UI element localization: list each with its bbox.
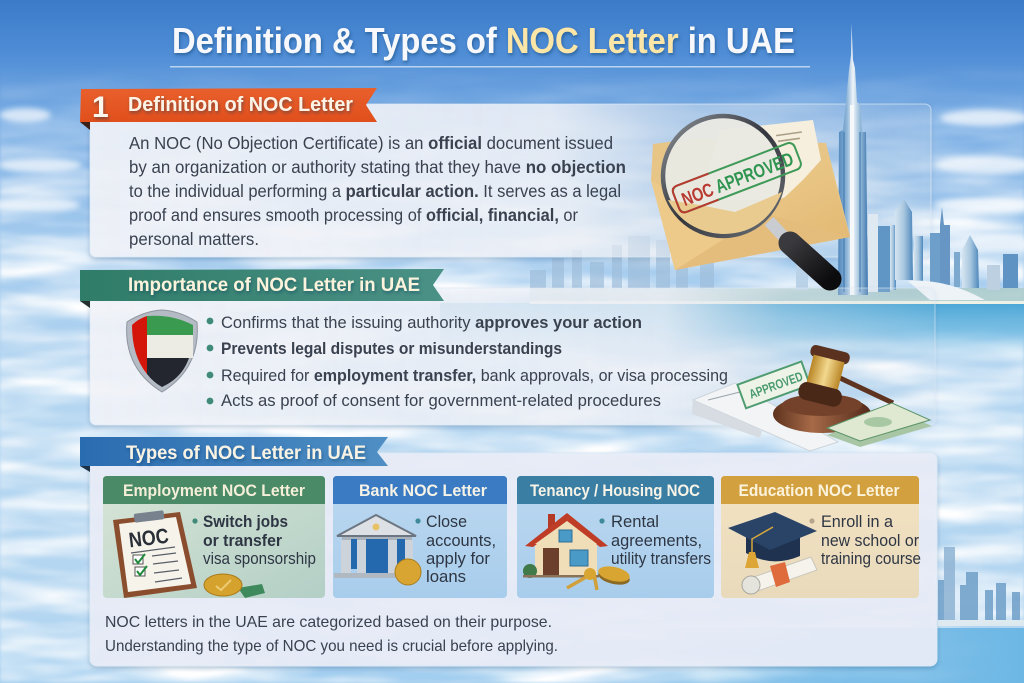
skyline: Dubai towers — [796, 23, 1018, 300]
illustration: gavel, papers and cash — [692, 343, 932, 451]
bullet list: Prevents legal disputes or misunderstandings — [221, 339, 562, 358]
ribbon: types heading — [80, 437, 388, 472]
icon: graduation cap and diploma — [728, 512, 817, 594]
icon: bank building — [334, 515, 421, 585]
card: tenancy: utility transfers — [611, 549, 711, 568]
card: tenancy: Tenancy / Housing NOC — [530, 482, 700, 500]
card: tenancy: agreements, — [611, 531, 702, 550]
bullet list — [207, 313, 728, 410]
title: Definition & Types of NOC Letter in UAE — [172, 20, 795, 61]
definition paragraph: to the individual performing a particular action. It serves as a legal — [129, 181, 621, 201]
definition paragraph: proof and ensures smooth processing of official, financial, or — [129, 205, 578, 225]
card text: visa sponsorship — [203, 549, 316, 568]
card text: Switch jobs — [203, 512, 288, 531]
icon: clipboard: NOC — [128, 525, 170, 552]
approved stamp — [737, 361, 810, 408]
bullet list: Confirms that the issuing authority approves your action — [221, 313, 642, 332]
stamp: NOC APPROVED — [679, 149, 797, 211]
icon: coin and note — [204, 574, 265, 598]
title underline — [170, 66, 810, 68]
card text — [192, 512, 316, 568]
card text: or transfer — [203, 531, 283, 550]
panel: importance — [90, 288, 935, 425]
icon: clipboard — [113, 510, 197, 598]
definition paragraph: by an organization or authority stating that they have no objection — [129, 157, 626, 177]
card: education: Education NOC Letter — [738, 482, 900, 500]
card: education: training course — [821, 549, 921, 568]
closing note — [105, 614, 558, 655]
card: education: Enroll in a — [821, 512, 894, 531]
ribbon: definition heading — [80, 88, 377, 130]
illustration: envelope and magnifier — [651, 116, 850, 279]
card: bank: loans — [426, 567, 466, 586]
card heading: Employment NOC Letter — [123, 482, 306, 500]
number 1: 1 — [92, 91, 109, 124]
card: bank — [333, 476, 507, 598]
approved stamp: APPROVED — [747, 368, 805, 402]
definition paragraph — [129, 133, 626, 249]
definition paragraph: An NOC (No Objection Certificate) is an official document issued — [129, 133, 613, 153]
gavel head — [797, 343, 853, 408]
card: bank: accounts, — [426, 531, 496, 550]
bullet list: Required for employment transfer, bank approvals, or visa processing — [221, 366, 728, 385]
closing note: Understanding the type of NOC you need is crucial before applying. — [105, 638, 558, 655]
heading text: Definition of NOC Letter — [128, 94, 353, 116]
card: bank: Close — [426, 512, 467, 531]
card: tenancy — [517, 476, 714, 598]
card: bank: Bank NOC Letter — [359, 482, 488, 500]
ribbon: importance heading — [80, 269, 444, 308]
distant skyline behind panel — [530, 236, 1024, 304]
magnifier lens — [663, 116, 783, 236]
ribbon: types heading: Types of NOC Letter in UAE — [126, 442, 366, 464]
cash stack — [827, 410, 932, 447]
card: bank: apply for — [426, 549, 490, 568]
card: tenancy: Rental — [611, 512, 659, 531]
icon: UAE flag shield — [127, 310, 197, 392]
small skyline bottom right — [938, 547, 1024, 626]
panel: definition — [90, 104, 931, 257]
magnifier handle — [769, 221, 783, 236]
closing note: NOC letters in the UAE are categorized based on their purpose. — [105, 614, 552, 631]
card: education: new school or — [821, 531, 919, 550]
definition paragraph: personal matters. — [129, 229, 259, 249]
bullet list: Acts as proof of consent for government-related procedures — [221, 391, 661, 410]
panel: types — [90, 453, 937, 666]
card: education — [721, 476, 921, 598]
icon: house and keys — [523, 513, 631, 590]
ribbon: importance heading: Importance of NOC Letter in UAE — [128, 274, 420, 296]
card: employment — [103, 476, 325, 598]
